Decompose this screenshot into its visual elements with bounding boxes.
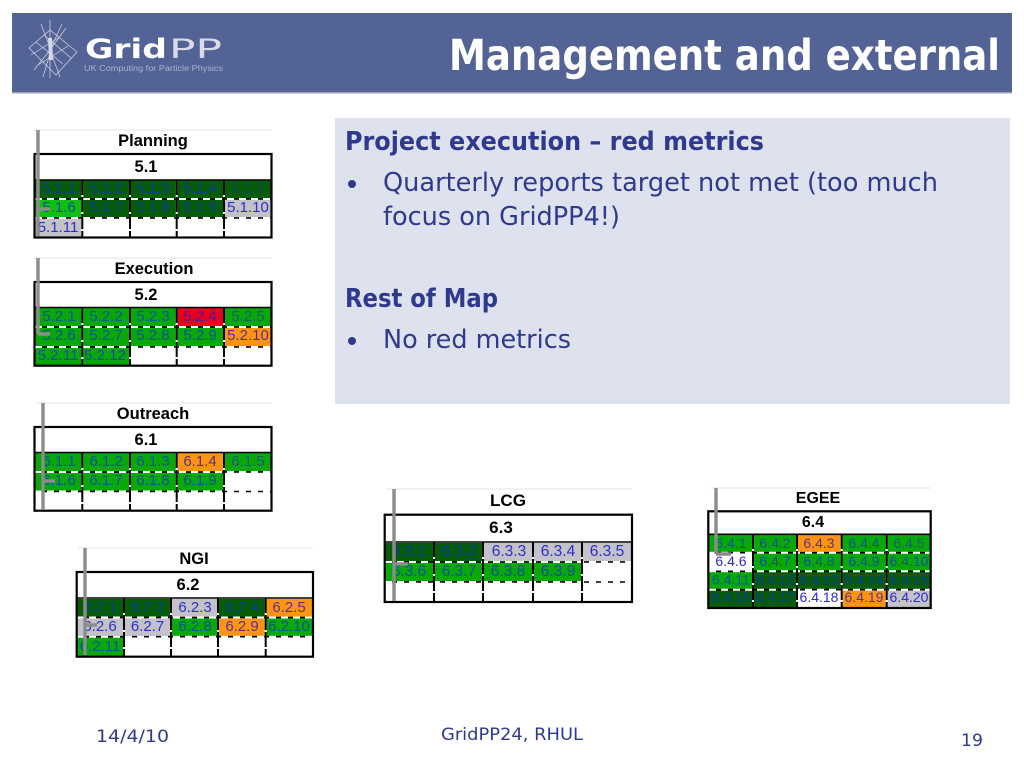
table: LCG 6.3: 6.3.4 bbox=[541, 543, 576, 560]
table: EGEE 6.4: 6.4.9 bbox=[848, 553, 880, 569]
heading: rest of map: Rest of Map bbox=[345, 284, 498, 314]
table: Execution 5.2: 5.2.4 bbox=[183, 308, 217, 325]
logo wordmark: Grid bbox=[85, 34, 167, 65]
table: EGEE 6.4: EGEE bbox=[796, 490, 841, 507]
table: Planning 5.1: 5.1.10 bbox=[227, 199, 269, 216]
table: NGI 6.2: 6.2 bbox=[177, 576, 199, 594]
table: EGEE 6.4: 6.4.17 bbox=[756, 589, 795, 605]
table: Outreach 6.1: 6.1.9 bbox=[183, 472, 217, 489]
table: Planning 5.1: 5.1.9 bbox=[183, 199, 217, 216]
table: Execution 5.2: 5.2.9 bbox=[183, 327, 217, 344]
table: EGEE 6.4: 6.4.7 bbox=[759, 553, 791, 569]
table: NGI 6.2: NGI bbox=[179, 550, 209, 568]
table: LCG 6.3: 6.3.5 bbox=[590, 543, 624, 560]
table: LCG 6.3: LCG bbox=[490, 491, 526, 510]
table: Outreach 6.1: 6.1.7 bbox=[89, 472, 123, 489]
table: NGI 6.2: 6.2.7 bbox=[131, 618, 164, 635]
table: EGEE 6.4: 6.4.6 bbox=[715, 553, 747, 569]
icon: GridPP grid logo bbox=[29, 20, 77, 78]
table: NGI 6.2: 6.2.10 bbox=[268, 618, 310, 635]
bullet: quarterly reports bbox=[348, 168, 938, 232]
table: Outreach 6.1 bbox=[34, 403, 272, 511]
table: Planning 5.1 bbox=[34, 130, 272, 238]
table: Outreach 6.1: 6.1.3 bbox=[136, 453, 170, 470]
table: Execution 5.2: 5.2.1 bbox=[42, 308, 76, 325]
table: EGEE 6.4: 6.4.13 bbox=[800, 572, 839, 588]
table: Outreach 6.1: 6.1.8 bbox=[136, 472, 170, 489]
table: Execution 5.2: 5.2.12 bbox=[84, 347, 126, 364]
logo wordmark: PP bbox=[169, 34, 222, 65]
heading: project execution: Project execution – red metrics bbox=[345, 127, 764, 157]
table: NGI 6.2: 6.2.9 bbox=[225, 618, 259, 635]
table: NGI 6.2: 6.2.3 bbox=[178, 599, 212, 616]
table: NGI 6.2 bbox=[76, 548, 314, 657]
bullet: no red metrics: No red metrics bbox=[383, 325, 571, 355]
table: Planning 5.1: 5.1.8 bbox=[136, 199, 170, 216]
logo wordmark bbox=[84, 34, 223, 73]
table: Outreach 6.1: 6.1.2 bbox=[89, 453, 123, 470]
footer date: 14/4/10 bbox=[96, 727, 169, 747]
table: NGI 6.2: 6.2.11 bbox=[80, 638, 120, 655]
table: LCG 6.3: 6.3 bbox=[489, 518, 513, 537]
table: LCG 6.3: 6.3.6 bbox=[392, 563, 426, 580]
table: Planning 5.1: 5.1.3 bbox=[136, 180, 170, 197]
table: EGEE 6.4: 6.4.1 bbox=[715, 535, 747, 551]
table: EGEE 6.4: 6.4.2 bbox=[759, 535, 791, 551]
page number: 19 bbox=[961, 731, 983, 751]
table: Outreach 6.1: 6.1.1 bbox=[42, 453, 76, 470]
table: Outreach 6.1: Outreach bbox=[117, 405, 189, 423]
table: EGEE 6.4: 6.4.10 bbox=[890, 553, 929, 569]
table: EGEE 6.4: 6.4.12 bbox=[756, 572, 795, 588]
table: Execution 5.2: 5.2.2 bbox=[89, 308, 123, 325]
table: NGI 6.2: 6.2.8 bbox=[178, 618, 212, 635]
table: Execution 5.2: 5.2.7 bbox=[89, 327, 123, 344]
table: Execution 5.2 bbox=[34, 258, 272, 366]
table: LCG 6.3 bbox=[384, 489, 633, 602]
header bar bbox=[12, 13, 1012, 94]
table: EGEE 6.4: 6.4.19 bbox=[845, 589, 884, 605]
table: Planning 5.1: 5.1.2 bbox=[89, 180, 123, 197]
table: EGEE 6.4: 6.4.20 bbox=[890, 589, 929, 605]
table: Execution 5.2: 5.2.10 bbox=[227, 327, 269, 344]
logo wordmark: UK Computing for Particle Physics bbox=[84, 64, 223, 73]
table: NGI 6.2: 6.2.2 bbox=[131, 599, 164, 616]
table: Planning 5.1: 5.1 bbox=[135, 158, 157, 176]
table: EGEE 6.4: 6.4.5 bbox=[893, 535, 925, 551]
table: Execution 5.2: 5.2.3 bbox=[136, 308, 170, 325]
table: EGEE 6.4: 6.4.8 bbox=[803, 553, 835, 569]
table: Execution 5.2: 5.2 bbox=[135, 286, 157, 304]
bullet: quarterly reports: focus on GridPP4!) bbox=[383, 202, 620, 232]
table: NGI 6.2: 6.2.6 bbox=[83, 618, 117, 635]
table: Planning 5.1: 5.1.11 bbox=[38, 219, 78, 236]
table: Execution 5.2: 5.2.8 bbox=[136, 327, 170, 344]
table: Outreach 6.1: 6.1.6 bbox=[42, 472, 76, 489]
table: EGEE 6.4: 6.4.18 bbox=[800, 589, 839, 605]
table: LCG 6.3: 6.3.2 bbox=[442, 543, 476, 560]
table: Planning 5.1: Planning bbox=[118, 132, 188, 150]
table: Outreach 6.1: 6.1.5 bbox=[231, 453, 265, 470]
table: LCG 6.3: 6.3.7 bbox=[442, 563, 476, 580]
table: Execution 5.2: 5.2.6 bbox=[42, 327, 76, 344]
table: EGEE 6.4: 6.4.15 bbox=[890, 572, 929, 588]
table: LCG 6.3: 6.3.3 bbox=[492, 543, 526, 560]
table: Planning 5.1: 5.1.1 bbox=[42, 180, 76, 197]
table: EGEE 6.4: 6.4.11 bbox=[712, 572, 750, 588]
table: Planning 5.1: 5.1.6 bbox=[42, 199, 76, 216]
panel: metrics summary bbox=[335, 118, 1010, 404]
table: Execution 5.2: Execution bbox=[115, 260, 193, 278]
footer event: GridPP24, RHUL bbox=[441, 725, 584, 745]
table: EGEE 6.4: 6.4.14 bbox=[845, 572, 884, 588]
table: EGEE 6.4: 6.4.16 bbox=[712, 589, 751, 605]
table: NGI 6.2: 6.2.4 bbox=[225, 599, 259, 616]
table: NGI 6.2: 6.2.1 bbox=[83, 599, 117, 616]
table: NGI 6.2: 6.2.5 bbox=[272, 599, 306, 616]
table: Execution 5.2: 5.2.11 bbox=[38, 347, 78, 364]
bullet: quarterly reports: Quarterly reports target not met (too much bbox=[383, 168, 938, 198]
table: EGEE 6.4 bbox=[708, 488, 931, 608]
table: Outreach 6.1: 6.1 bbox=[135, 431, 157, 449]
table: EGEE 6.4: 6.4 bbox=[802, 514, 824, 531]
table: Outreach 6.1: 6.1.4 bbox=[183, 453, 217, 470]
table: Execution 5.2: 5.2.5 bbox=[231, 308, 265, 325]
table: EGEE 6.4: 6.4.4 bbox=[848, 535, 880, 551]
table: EGEE 6.4: 6.4.3 bbox=[803, 535, 835, 551]
table: Planning 5.1: 5.1.5 bbox=[231, 180, 265, 197]
table: LCG 6.3: 6.3.1 bbox=[392, 543, 426, 560]
table: Planning 5.1: 5.1.4 bbox=[183, 180, 217, 197]
table: Planning 5.1: 5.1.7 bbox=[89, 199, 123, 216]
table: LCG 6.3: 6.3.9 bbox=[541, 563, 575, 580]
table: LCG 6.3: 6.3.8 bbox=[491, 563, 525, 580]
